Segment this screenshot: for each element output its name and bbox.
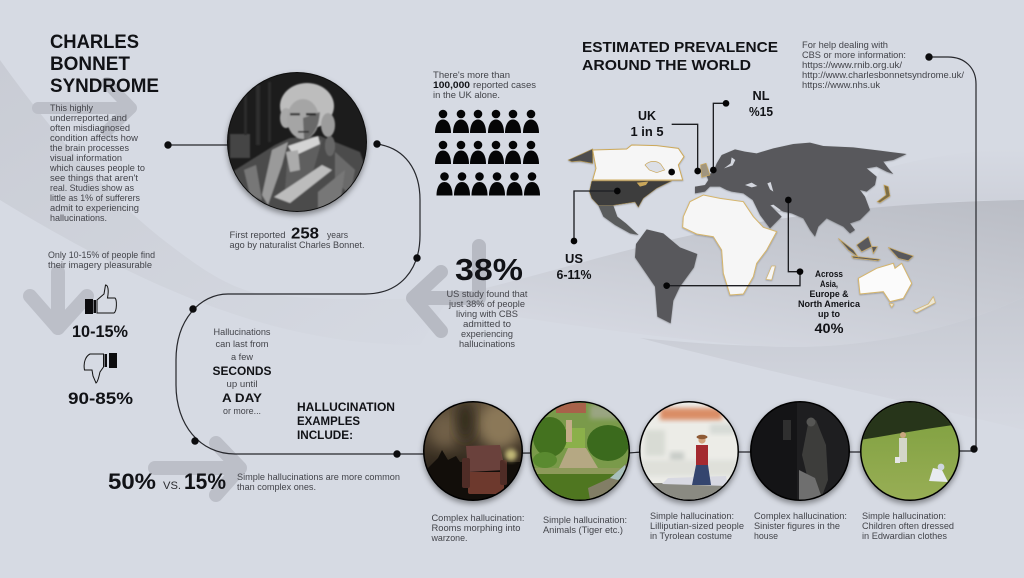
map: USA: [589, 181, 672, 207]
icon: thumbs down: [84, 353, 117, 383]
map label: Asia, Europe and North America: North America: [798, 299, 861, 309]
hallucination duration text: can last from: [216, 339, 269, 349]
decorative arrow: right, behind 50 vs 15: [155, 443, 240, 495]
intro text block: underreported and: [50, 113, 127, 123]
hallucination duration text: [212, 327, 272, 416]
hallucination duration text: Hallucinations: [214, 327, 271, 337]
caption: children: [862, 511, 954, 541]
decorative arrow: left, behind 38%: [413, 246, 479, 331]
portrait of Charles Bonnet: [227, 72, 368, 212]
comparison caption: [237, 472, 400, 492]
intro text block: condition affects how: [50, 133, 138, 143]
decorative arrow: right, behind title: [38, 83, 131, 131]
map label: NL: [749, 89, 773, 119]
intro text block: visual information: [50, 153, 122, 163]
title: [50, 32, 159, 97]
caption: animals: Simple hallucination:: [543, 515, 627, 525]
map: Africa: [683, 195, 777, 295]
map label: Asia, Europe and North America: Across: [815, 269, 843, 279]
map label: Asia, Europe and North America: 40%: [814, 321, 844, 336]
hallucination duration text: SECONDS: [212, 366, 272, 378]
UK cases text: [433, 70, 536, 100]
caption: warzone: [431, 513, 524, 543]
caption: sinister figures: Complex hallucination:: [754, 511, 847, 521]
first reported caption: [230, 226, 364, 250]
icon grid: people: [435, 110, 540, 196]
decorative arrow: down, left column: [30, 272, 87, 328]
38% caption: just 38% of people: [448, 299, 525, 309]
UK cases text: reported cases: [473, 80, 536, 90]
38% caption: hallucinations: [459, 339, 515, 349]
first reported caption: First reported: [230, 230, 286, 240]
comparison stat: 50% vs 15%: VS.: [163, 480, 181, 492]
heading: prevalence: AROUND THE WORLD: [582, 57, 751, 74]
map label: Asia, Europe and North America: Asia,: [820, 279, 838, 289]
intro text block: often misdiagnosed: [50, 123, 130, 133]
heading: hallucination examples: INCLUDE:: [297, 430, 353, 442]
map: Japan: [877, 185, 890, 203]
help text block: https://www.nhs.uk: [802, 80, 880, 90]
intro text block: [49, 103, 145, 223]
map: Alaska: [568, 149, 593, 163]
stat: 90-85%: 90-85%: [68, 390, 133, 408]
caption: children: Simple hallucination:: [862, 511, 946, 521]
icon: thumbs up: [85, 285, 116, 314]
intro text block: little as 1% of sufferers: [50, 193, 140, 203]
help text block: [802, 40, 964, 90]
heading: prevalence: ESTIMATED PREVALENCE: [582, 39, 778, 56]
map label: Asia, Europe and North America: up to: [818, 309, 840, 319]
map label: US: 6-11%: [556, 268, 592, 282]
caption: warzone: warzone.: [431, 533, 468, 543]
caption: children: Children often dressed: [862, 521, 954, 531]
help text block: https://www.rnib.org.uk/: [802, 60, 902, 70]
UK cases text: There's more than: [433, 70, 510, 80]
38% caption: experiencing: [461, 329, 513, 339]
map: Madagascar: [766, 266, 775, 280]
caption: warzone: Rooms morphing into: [432, 523, 520, 533]
heading: hallucination examples: [297, 402, 395, 442]
world map: [568, 100, 935, 323]
map label: UK: 1 in 5: [630, 125, 664, 139]
caption: animals: Animals (Tiger etc.): [543, 525, 623, 535]
caption: animals: [543, 515, 627, 535]
38% caption: [446, 289, 528, 349]
hallucination duration text: up until: [226, 379, 258, 389]
intro text block: This highly: [50, 103, 93, 113]
caption: sinister figures: [754, 511, 847, 541]
map: Mexico and Central America: [598, 205, 639, 235]
heading: prevalence: [582, 39, 778, 74]
intro text block: see things that aren't: [50, 173, 138, 183]
caption: Lilliputian: Simple hallucination:: [650, 511, 734, 521]
caption: children: in Edwardian clothes: [862, 531, 947, 541]
map label: US: [556, 252, 592, 282]
comparison caption: than complex ones.: [237, 482, 316, 492]
intro text block: admit to experiencing: [50, 203, 139, 213]
intro text block: real. Studies show as: [50, 183, 134, 193]
caption: Lilliputian: in Tyrolean costume: [650, 531, 732, 541]
comparison stat: 50% vs 15%: 50%: [108, 469, 156, 494]
hallucination duration text: or more...: [223, 406, 261, 416]
caption: warzone: Complex hallucination:: [432, 513, 524, 523]
pleasurable imagery note: [48, 250, 155, 270]
connector timeline: [164, 53, 978, 458]
map: Great Lakes detail: [637, 182, 648, 187]
map: Eurasia: [695, 143, 907, 237]
UK cases text: in the UK alone.: [433, 90, 500, 100]
hallucination duration text: A DAY: [222, 393, 262, 405]
map: Baltic, Black Sea, Caspian, Gulf: [724, 157, 781, 211]
map label: UK: UK: [638, 109, 656, 123]
stat: 38%: 38%: [455, 252, 523, 287]
photo: garden: [530, 401, 630, 501]
help text block: http://www.charlesbonnetsyndrome.uk/: [802, 70, 964, 80]
map: Canadian islands and Hudson Bay: [645, 161, 665, 173]
caption: Lilliputian: Lilliputian-sized people: [650, 521, 744, 531]
photo: children in field: [860, 401, 960, 501]
map: Southeast Asia islands: [838, 237, 913, 261]
stat: 10-15%: 10-15%: [72, 323, 128, 341]
heading: hallucination examples: EXAMPLES: [297, 416, 360, 428]
UK cases text: 100,000: [433, 80, 470, 90]
38% caption: US study found that: [446, 289, 528, 299]
caption: Lilliputian: [650, 511, 744, 541]
intro text block: the brain processes: [50, 143, 129, 153]
comparison stat: 50% vs 15%: [108, 469, 226, 494]
map: Canada: [593, 145, 684, 180]
map label: NL: NL: [752, 89, 770, 103]
photo: armchair warzone: [423, 400, 524, 502]
map label: NL: %15: [749, 105, 773, 119]
first reported caption: years: [327, 230, 348, 240]
intro text block: which causes people to: [49, 163, 145, 173]
map: New Zealand: [889, 297, 935, 313]
38% caption: admitted to: [463, 319, 511, 329]
map label: UK: [630, 109, 664, 139]
help text block: For help dealing with: [802, 40, 888, 50]
pleasurable imagery note: Only 10-15% of people find: [48, 250, 155, 260]
title: CHARLES: [50, 32, 139, 53]
map: UK: [701, 163, 710, 177]
comparison caption: Simple hallucinations are more common: [237, 472, 400, 482]
map label: Asia, Europe and North America: [798, 269, 861, 336]
map: South America: [635, 229, 697, 323]
intro text block: hallucinations.: [50, 213, 107, 223]
38% caption: living with CBS: [456, 309, 518, 319]
map markers: [571, 100, 803, 289]
comparison stat: 50% vs 15%: 15%: [184, 469, 226, 494]
map: Australia: [858, 263, 912, 302]
photo: sinister figure: [750, 401, 850, 501]
title: BONNET: [50, 54, 130, 75]
pleasurable imagery note: their imagery pleasurable: [48, 260, 152, 270]
heading: hallucination examples: HALLUCINATION: [297, 402, 395, 414]
hallucination duration text: a few: [231, 352, 253, 362]
caption: sinister figures: house: [754, 531, 778, 541]
map label: Asia, Europe and North America: Europe &: [810, 289, 849, 299]
first reported caption: ago by naturalist Charles Bonnet.: [230, 240, 364, 250]
photo: Lilliputian person: [639, 401, 739, 501]
map call-out lines: [574, 103, 800, 286]
first reported caption: 258: [291, 226, 319, 242]
caption: sinister figures: Sinister figures in the: [754, 521, 840, 531]
help text block: CBS or more information:: [802, 50, 906, 60]
map label: US: US: [565, 252, 583, 266]
title: SYNDROME: [50, 76, 159, 97]
